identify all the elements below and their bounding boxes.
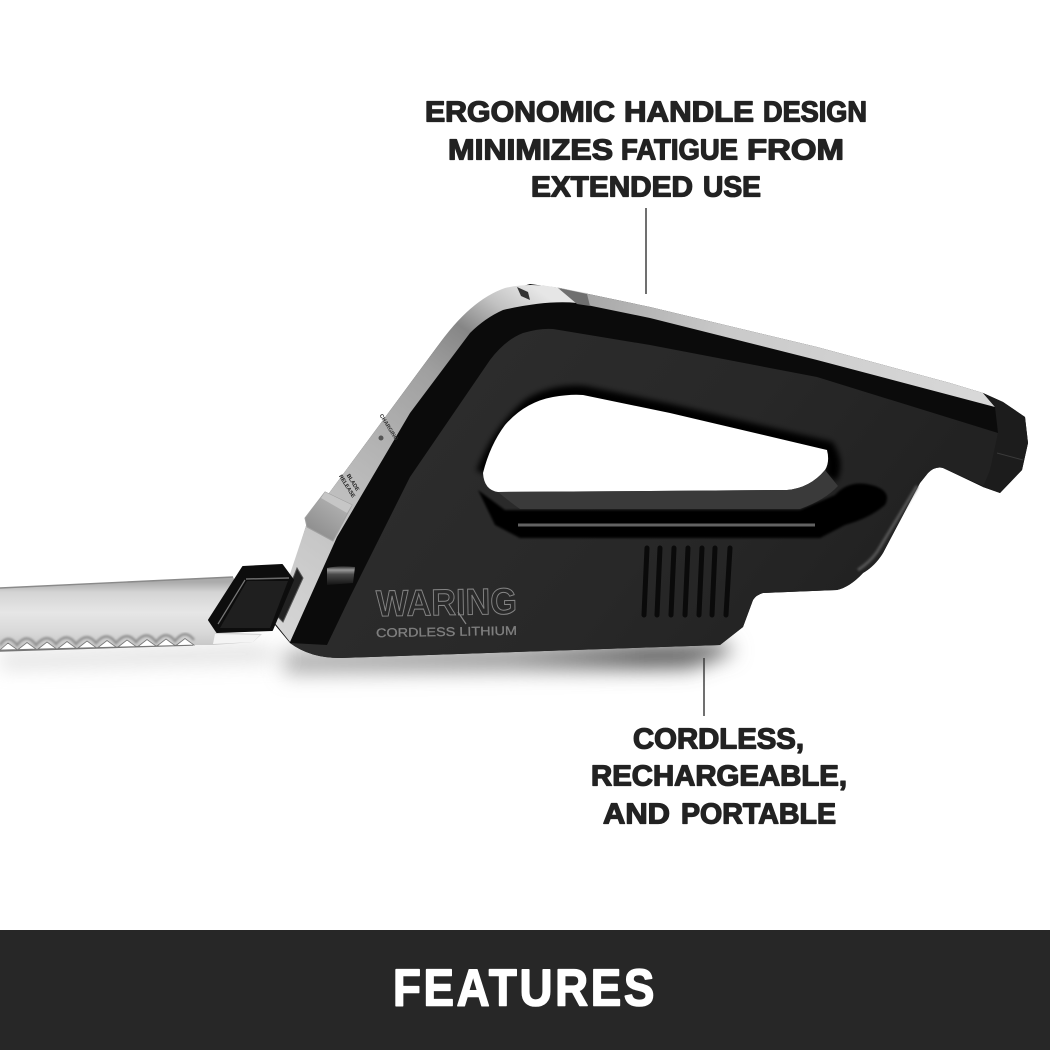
heading: ergonomic handle callout: ERGONOMIC (425, 96, 615, 128)
heading: ergonomic handle callout: FATIGUE (621, 134, 738, 166)
black bevel around grip opening (483, 392, 834, 478)
footer banner (0, 930, 1050, 1050)
knife handle (209, 284, 1028, 658)
brand logo (376, 581, 517, 640)
grip ledge (498, 470, 838, 509)
shadow under knife (0, 642, 735, 674)
steel top strip (560, 288, 995, 407)
heading: cordless callout (591, 724, 847, 830)
knife blade (0, 577, 262, 651)
heading: ergonomic handle callout: FROM (747, 134, 844, 166)
blade release label: BLADE (345, 473, 360, 493)
heading: cordless callout: CORDLESS, (633, 724, 804, 756)
heading: ergonomic handle callout: DESIGN (763, 96, 867, 128)
blade connector slot (278, 568, 303, 622)
leader line: handle callout (645, 208, 647, 294)
end cap (983, 393, 1028, 493)
steel spine band (274, 285, 587, 642)
heading: cordless callout: AND (603, 798, 670, 830)
grip ledge shadow (478, 483, 887, 538)
ledge highlight (518, 524, 815, 526)
heading: ergonomic handle callout: EXTENDED (531, 172, 693, 204)
brand logo: CORDLESS LITHIUM (376, 624, 517, 640)
leader line: cordless callout (703, 658, 705, 716)
underside edge highlight (858, 486, 917, 570)
heading: ergonomic handle callout: MINIMIZES (448, 134, 613, 166)
blade release label: RELEASE (337, 474, 356, 499)
heading: ergonomic handle callout (425, 96, 867, 204)
brand logo: WARING (376, 581, 517, 624)
footer title: FEATURES (393, 960, 657, 1018)
top switch marks (517, 287, 530, 300)
indicator window (558, 288, 590, 306)
handle black silhouette (275, 284, 1028, 658)
black blade clip (209, 565, 293, 632)
heading: cordless callout: PORTABLE (681, 798, 836, 830)
vent slots (644, 548, 730, 615)
grip opening (483, 395, 828, 492)
heading: cordless callout: RECHARGEABLE, (591, 760, 847, 792)
heading: ergonomic handle callout: USE (703, 172, 761, 204)
blade release button (305, 492, 352, 541)
charging label: CHARGING (378, 413, 399, 442)
end cap seam (997, 453, 1023, 460)
heading: ergonomic handle callout: HANDLE (624, 96, 754, 128)
matte handle body (290, 329, 998, 658)
side port (327, 566, 355, 585)
